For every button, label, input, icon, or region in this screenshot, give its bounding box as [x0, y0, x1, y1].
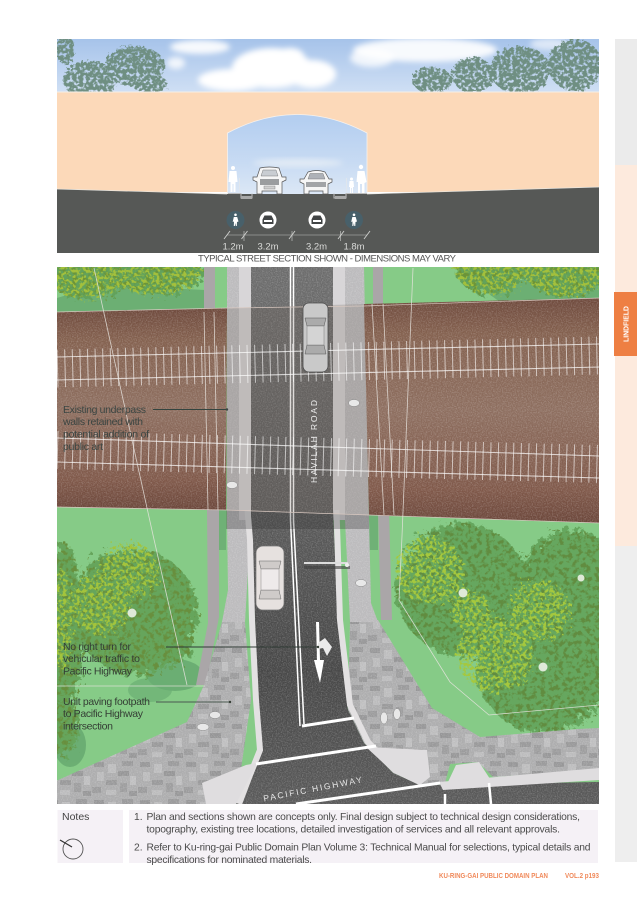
pedestrians plan [197, 400, 400, 730]
icon: north compass [60, 839, 83, 859]
notes text panel: 2. [134, 842, 143, 854]
pale footpath bands [239, 267, 345, 520]
paving right [348, 620, 599, 785]
kerb lines [239, 510, 422, 804]
side tab strip [614, 39, 637, 862]
footpaths [222, 267, 378, 622]
notes text panel: 1. [134, 812, 143, 823]
road markings [256, 267, 491, 804]
annotation: no right turn: No right turn for [63, 641, 132, 653]
icon: car 3.2m [260, 212, 276, 228]
notes text panel: specifications for nominated materials. [146, 855, 312, 866]
thin survey lines [57, 268, 599, 715]
icon: pedestrian 1.2m [226, 211, 244, 229]
road surface [236, 267, 599, 804]
dimension line [224, 231, 370, 241]
retaining strips [196, 267, 392, 685]
notes box: Notes [62, 811, 89, 823]
plan view panel [57, 267, 599, 804]
annotation: underpass walls: potential addition of [63, 428, 149, 440]
road ground profile [57, 187, 599, 253]
tree canopies [43, 232, 627, 755]
kerbs [228, 194, 367, 199]
dimension labels [222, 242, 365, 252]
dimension labels: 3.2m [306, 242, 327, 252]
car front elevation [253, 167, 286, 194]
annotation: no right turn [63, 641, 319, 678]
turn arrow marking [314, 622, 332, 683]
annotation: unit paving: to Pacific Highway [63, 708, 144, 720]
footer: KU-RING-GAI PUBLIC DOMAIN PLAN [439, 871, 548, 880]
notes text panel: Refer to Ku-ring-gai Public Domain Plan Volume 3: Technical Manual for selections, typical details and [146, 842, 591, 854]
street cross-section panel [55, 36, 602, 253]
dimension labels: 1.8m [343, 242, 365, 252]
corner footpath ramps [202, 747, 599, 804]
peach underpass wall [57, 92, 599, 192]
footer: VOL.2 p193 [565, 871, 599, 880]
dimension labels: 3.2m [257, 242, 279, 252]
car plan north [303, 303, 328, 372]
notes text panel: Plan and sections shown are concepts only. Final design subject to technical design considerations, [146, 812, 580, 823]
tab: LINDFIELD [614, 292, 637, 356]
pedestrians right [346, 165, 366, 193]
section caption: TYPICAL STREET SECTION SHOWN - DIMENSIONS MAY VARY [198, 254, 457, 264]
annotation: underpass walls: walls retained with [62, 416, 143, 428]
annotation: no right turn: vehicular traffic to [63, 653, 140, 665]
bridge overlay [57, 298, 599, 529]
annotation: unit paving [63, 698, 232, 730]
annotation: underpass walls: public art [63, 441, 103, 453]
annotation: unit paving: intersection [63, 720, 113, 732]
sky with clouds and trees [57, 39, 599, 92]
tab: LINDFIELD: LINDFIELD [624, 306, 630, 342]
pedestrian left [228, 166, 240, 192]
annotation: no right turn: Pacific Highway [63, 666, 133, 678]
dimension labels: 1.2m [222, 242, 244, 252]
icon: car 3.2m [308, 212, 326, 228]
barrier arm [304, 562, 350, 569]
rail corridor left [57, 308, 227, 510]
street name: Pacific Highway: PACIFIC HIGHWAY [262, 775, 363, 803]
annotation: underpass walls: Existing underpass [63, 404, 146, 416]
notes box [58, 810, 123, 863]
notes text panel [129, 810, 598, 866]
annotation: unit paving: Unit paving footpath [63, 696, 150, 708]
notes text panel: topography, existing tree locations, detailed investigation of services and all relevant approvals. [146, 824, 560, 836]
green verge base [57, 267, 599, 804]
car plan south [256, 546, 284, 610]
railway tracks [57, 344, 599, 478]
icon: pedestrian 1.8m [345, 211, 363, 229]
tree trunk markers [128, 574, 584, 672]
arched opening [228, 114, 367, 196]
canopy shadows [54, 280, 599, 767]
car rear elevation [300, 170, 332, 194]
street name: Havilah Road: HAVILAH ROAD [309, 400, 319, 483]
rail corridor right [364, 298, 599, 523]
paving left [57, 622, 251, 804]
annotation: underpass walls [62, 404, 228, 453]
